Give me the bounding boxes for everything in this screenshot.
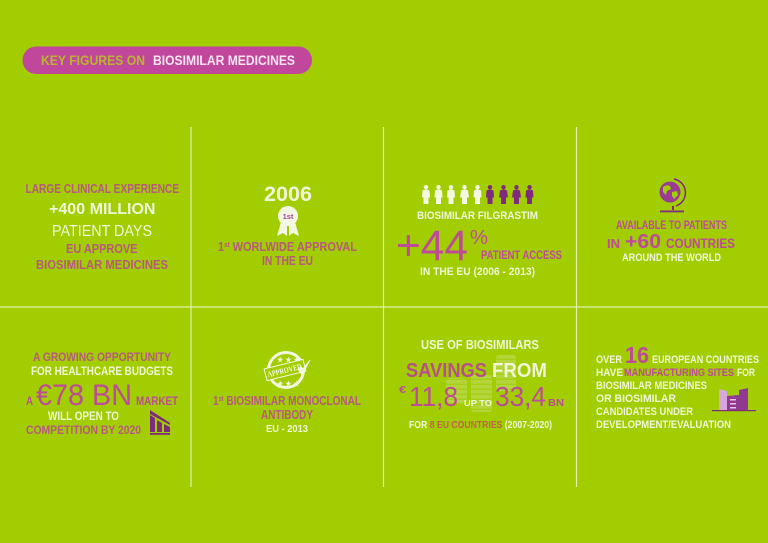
panel: savings: BN bbox=[548, 397, 564, 409]
panel: growing opportunity 78 BN: WILL OPEN TO bbox=[48, 411, 119, 423]
panel: monoclonal antibody: 1 bbox=[213, 394, 220, 408]
panel: first approval 2006: 1 bbox=[218, 240, 225, 254]
panel: savings bbox=[399, 338, 564, 431]
panel: savings: € bbox=[399, 385, 407, 396]
panel: filgrastim patient access: BIOSIMILAR FILGRASTIM bbox=[417, 210, 538, 222]
panel: monoclonal antibody bbox=[213, 352, 361, 435]
panel: growing opportunity 78 BN: MARKET bbox=[136, 394, 179, 408]
panel: clinical experience: LARGE CLINICAL EXPERIENCE bbox=[26, 182, 179, 196]
panel: monoclonal antibody: BIOSIMILAR MONOCLONAL bbox=[224, 394, 361, 408]
panel: filgrastim patient access: % bbox=[470, 227, 488, 249]
icon: award ribbon: 1st bbox=[283, 212, 294, 221]
panel: manufacturing sites: BIOSIMILAR MEDICINES bbox=[596, 380, 707, 392]
panel: growing opportunity 78 BN: €78 BN bbox=[36, 379, 132, 412]
panel: savings: 11,8 bbox=[409, 381, 458, 412]
panel: filgrastim patient access: +44 bbox=[396, 222, 468, 270]
panel: manufacturing sites: OVER bbox=[596, 354, 622, 366]
panel: growing opportunity 78 BN: COMPETITION BY 2020 bbox=[26, 423, 141, 437]
icon: approved stamp: ★ ★ ★ bbox=[277, 356, 300, 364]
panel: savings: SAVINGS bbox=[406, 360, 487, 382]
panel: manufacturing sites: OR BIOSIMILAR bbox=[596, 393, 676, 405]
icon: globe bbox=[660, 179, 685, 212]
panel: available in 60 countries: IN bbox=[607, 236, 620, 251]
panel: first approval 2006: IN THE EU bbox=[262, 254, 313, 268]
panel: manufacturing sites bbox=[596, 342, 759, 431]
title banner: BIOSIMILAR MEDICINES bbox=[153, 53, 295, 68]
panel: growing opportunity 78 BN bbox=[26, 350, 179, 437]
panel: savings: UP TO bbox=[464, 398, 492, 408]
panel: monoclonal antibody: st bbox=[219, 396, 224, 403]
icon: row of people bbox=[422, 185, 534, 204]
panel: available in 60 countries bbox=[607, 179, 735, 264]
panel: monoclonal antibody: EU - 2013 bbox=[266, 423, 308, 435]
panel: manufacturing sites: 16 bbox=[625, 342, 649, 368]
panel: savings: 33,4 bbox=[495, 381, 546, 412]
panel: savings: USE OF BIOSIMILARS bbox=[421, 338, 539, 352]
icon: factory buildings bbox=[712, 388, 756, 411]
panel: growing opportunity 78 BN: A GROWING OPPORTUNITY bbox=[33, 350, 171, 364]
panel: filgrastim patient access bbox=[396, 185, 562, 278]
panel: available in 60 countries: COUNTRIES bbox=[666, 235, 735, 251]
panel: clinical experience: EU APPROVE bbox=[66, 242, 138, 256]
panel: growing opportunity 78 BN: FOR HEALTHCARE BUDGETS bbox=[31, 366, 173, 378]
title banner: KEY FIGURES ON bbox=[41, 53, 145, 68]
panel: manufacturing sites: DEVELOPMENT/EVALUATION bbox=[596, 419, 731, 431]
panel: clinical experience: PATIENT DAYS bbox=[52, 223, 152, 240]
panel: growing opportunity 78 BN: A bbox=[26, 396, 33, 408]
icon: approved stamp: APPROVED bbox=[267, 362, 303, 379]
panel: clinical experience bbox=[26, 182, 179, 272]
panel: savings: FROM bbox=[492, 360, 547, 382]
panel: manufacturing sites: CANDIDATES UNDER bbox=[596, 406, 693, 418]
panel: available in 60 countries: AROUND THE WORLD bbox=[622, 252, 721, 264]
panel: clinical experience: BIOSIMILAR MEDICINES bbox=[36, 258, 168, 272]
panel: manufacturing sites: HAVE bbox=[596, 367, 623, 379]
title banner bbox=[22, 46, 312, 74]
panel: first approval 2006: st bbox=[224, 242, 230, 249]
panel: manufacturing sites: FOR bbox=[737, 367, 755, 379]
icon: approved stamp bbox=[264, 352, 310, 388]
panel: available in 60 countries: +60 bbox=[625, 231, 661, 253]
panel: first approval 2006: WORLWIDE APPROVAL bbox=[230, 240, 357, 254]
panel: manufacturing sites: MANUFACTURING SITES bbox=[624, 367, 734, 379]
panel: filgrastim patient access: PATIENT ACCESS bbox=[481, 248, 562, 262]
panel: first approval 2006 bbox=[218, 183, 357, 268]
icon: declining bar chart bbox=[150, 410, 170, 435]
panel: clinical experience: +400 MILLION bbox=[49, 201, 156, 218]
panel: monoclonal antibody: ANTIBODY bbox=[261, 408, 314, 422]
panel: available in 60 countries: AVAILABLE TO PATIENTS bbox=[616, 220, 727, 232]
icon: coin stacks bbox=[446, 355, 516, 412]
panel: savings: FOR 8 EU COUNTRIES (2007-2020) bbox=[409, 419, 552, 431]
icon: approved stamp: ★ ★ ★ bbox=[277, 380, 300, 388]
panel: filgrastim patient access: IN THE EU (2006 - 2013) bbox=[420, 266, 535, 278]
panel: first approval 2006: 2006 bbox=[264, 183, 312, 206]
